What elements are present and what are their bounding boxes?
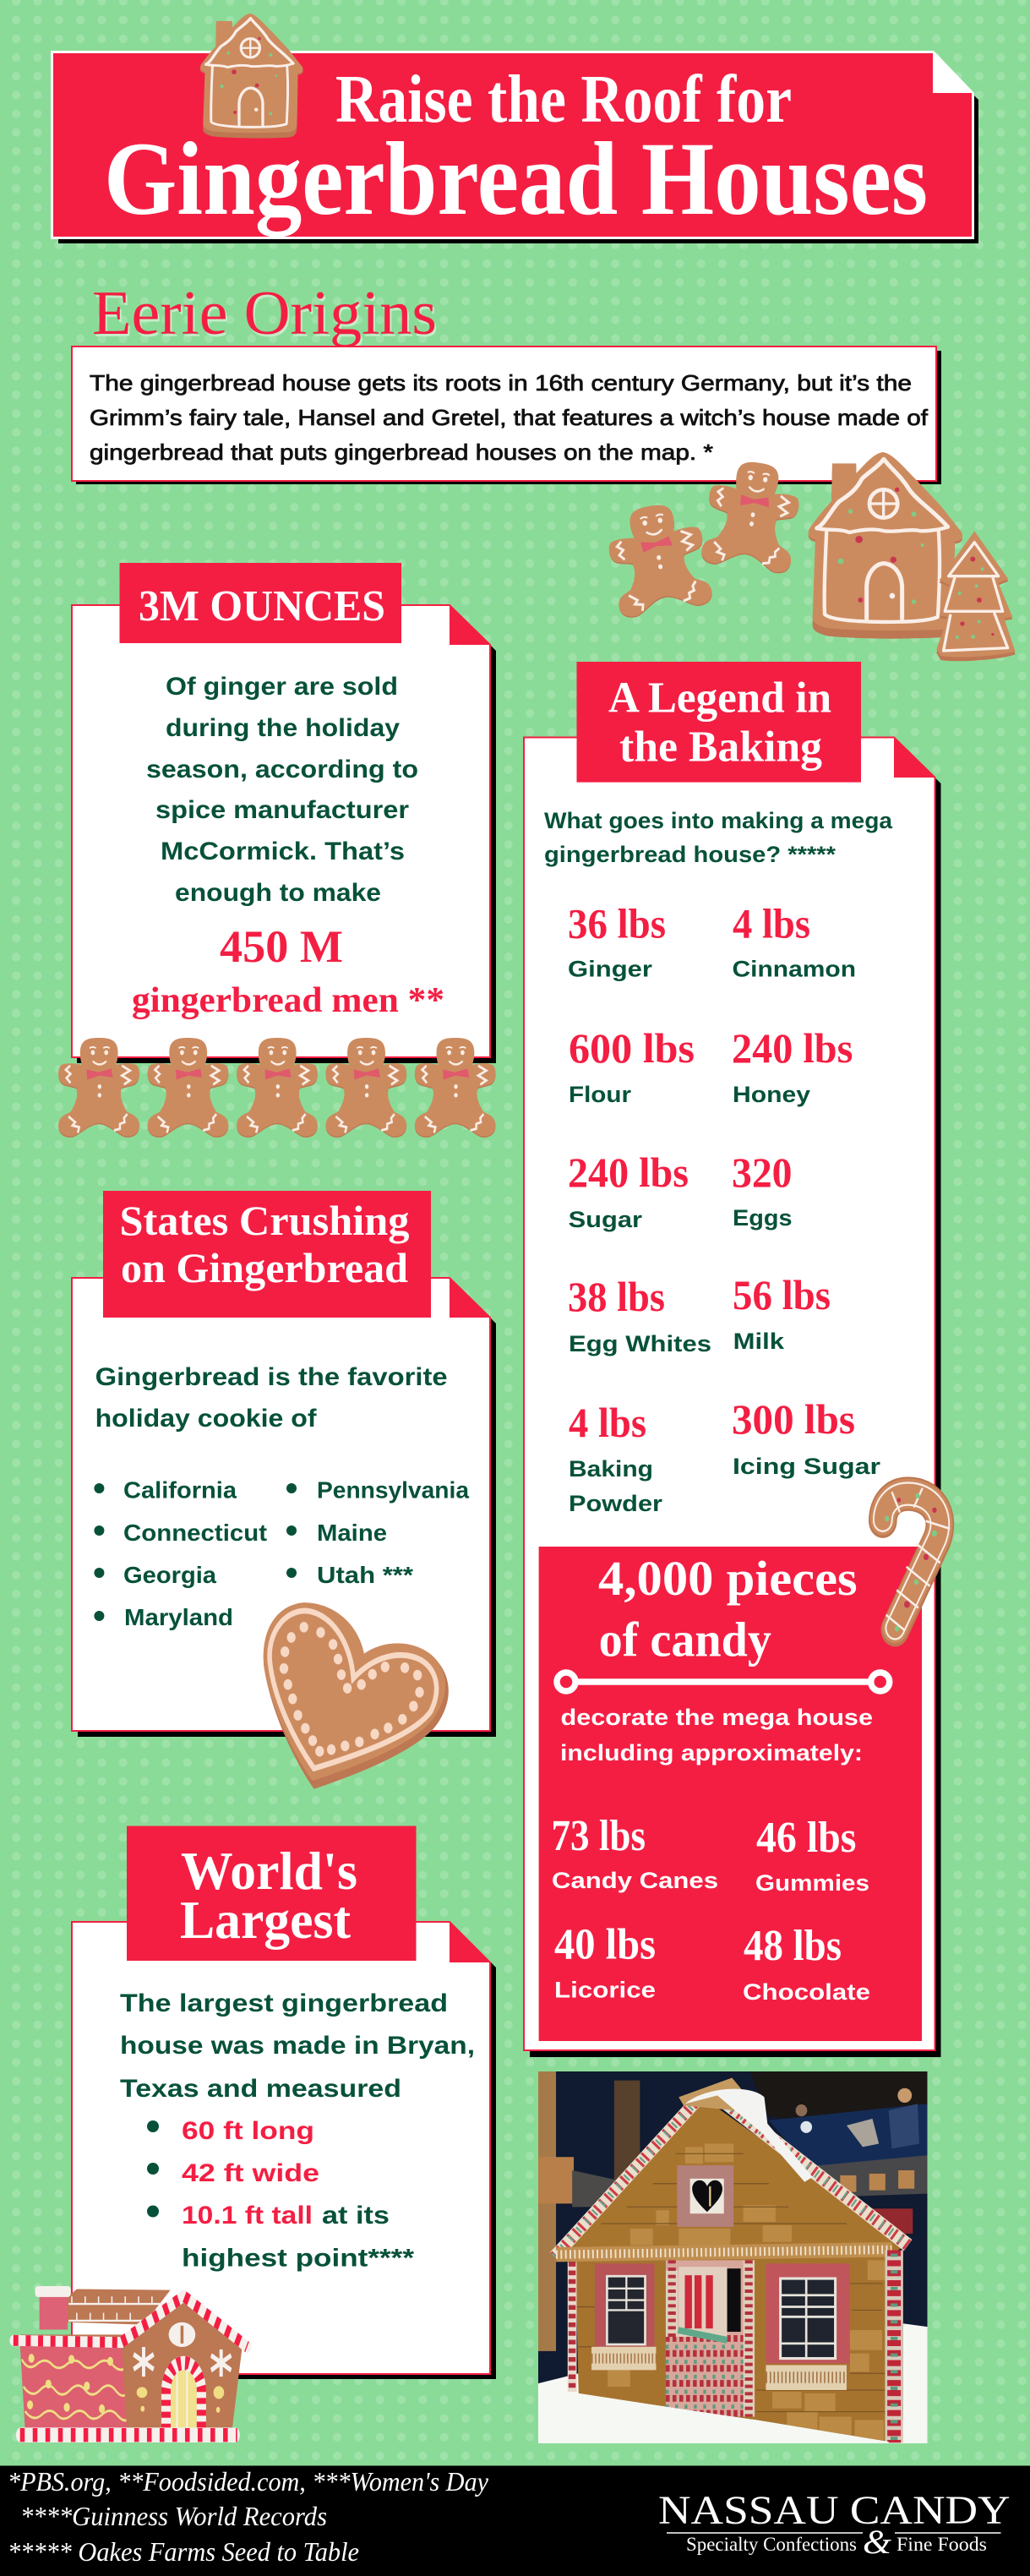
tab: world's largest [127,1826,416,1961]
ginger paragraph: enough to make [175,879,381,907]
measurements list [147,2117,414,2272]
tab: states crushing [103,1191,431,1318]
measurements list: at its [322,2202,390,2229]
tab: world's largest: Largest [180,1890,352,1950]
candy: candy canes: Candy Canes [552,1868,718,1893]
panel: states crushing on gingerbread [72,1191,496,1737]
ingredient: flour: Flour [569,1082,632,1107]
states list: California [123,1477,237,1504]
title banner [51,51,978,243]
tab: a legend in the baking: the Baking [619,723,822,772]
states intro: holiday cookie of [95,1405,318,1433]
tab: 3M ounces [120,563,401,643]
states list: Georgia [123,1562,216,1588]
measurements list: 60 ft long [182,2117,314,2145]
source citations: ***** Oakes Farms Seed to Table [8,2536,359,2567]
ingredient: egg whites [568,1273,711,1356]
ingredient: baking powder: 4 lbs [569,1399,646,1446]
states list: Connecticut [123,1520,267,1546]
ingredient: egg whites: Egg Whites [569,1331,711,1356]
states list [94,1477,469,1630]
origins paragraph: gingerbread that puts gingerbread houses on the map. * [90,439,713,465]
measurements list: highest point**** [182,2245,414,2272]
ingredient: baking powder [569,1399,663,1516]
states list: Maine [317,1520,387,1546]
ingredient: cinnamon: Cinnamon [732,957,856,982]
icon: gingerbread house on banner [200,14,302,139]
stat: 450 M: 450 M [220,921,343,972]
origins paragraph: The gingerbread house gets its roots in 16th century Germany, but it’s the [90,370,912,396]
divider with rings [557,1673,890,1691]
ginger paragraph: Of ginger are sold [166,673,398,701]
icon: gingerbread man left [602,498,714,619]
candy: licorice: Licorice [554,1978,656,2003]
title line two: Gingerbread Houses [104,121,928,237]
panel: world's largest [72,1826,496,2379]
logo: Nassau Candy [658,2488,1011,2561]
candy: gummies [755,1814,869,1896]
ingredient: baking powder: Powder [569,1491,663,1516]
candy: candy canes: 73 lbs [551,1812,646,1860]
ingredient: eggs: Eggs [733,1205,793,1231]
candy: chocolate: Chocolate [743,1979,870,2005]
ingredient: eggs [732,1149,793,1231]
largest house paragraph: house was made in Bryan, [120,2032,475,2060]
candy: gummies: 46 lbs [756,1814,856,1862]
ingredient: honey: 240 lbs [732,1024,853,1072]
ingredient: egg whites: 38 lbs [568,1273,665,1320]
row of gingerbread men [58,1038,496,1138]
icon: gingerbread tree [936,531,1016,661]
ginger paragraph: season, according to [146,756,418,783]
ingredient: cinnamon: 4 lbs [733,899,810,947]
heading: Eerie Origins: Eerie Origins [92,279,437,348]
ingredient: eggs: 320 [732,1149,793,1196]
icon: gingerbread heart [264,1602,449,1789]
candy: candy canes [551,1812,718,1893]
ingredient: honey: Honey [733,1082,810,1107]
tab: a legend in the baking [576,662,861,783]
candy: licorice [554,1921,656,2003]
candy intro: including approximately: [560,1740,863,1766]
icon: gingerbread house [809,452,962,639]
largest house paragraph: Texas and measured [120,2075,401,2103]
footer bar [0,2466,1030,2576]
ingredient: sugar: 240 lbs [568,1149,689,1196]
ingredient: ginger [568,899,666,982]
panel: 4,000 pieces of candy [539,1547,922,2041]
ingredient: flour: 600 lbs [569,1024,695,1072]
title line one: Raise the Roof for [335,63,792,137]
candy: gummies: Gummies [755,1870,869,1896]
ginger paragraph: spice manufacturer [155,796,409,824]
ingredient: honey [732,1024,853,1107]
ingredient: milk: Milk [733,1329,785,1354]
ingredient: milk [733,1271,831,1354]
measurements list: 10.1 ft tall [182,2202,313,2229]
icon: candy gingerbread house [14,2286,248,2442]
origins paragraph: Grimm’s fairy tale, Hansel and Gretel, that features a witch’s house made of [90,405,929,430]
panel: a legend in the baking [524,662,941,2057]
states list: Utah *** [317,1562,413,1588]
ingredient: ginger: Ginger [568,957,653,982]
icon: gingerbread candy cane [883,1488,950,1631]
states list: Pennsylvania [317,1477,469,1504]
states list: Maryland [124,1604,233,1630]
tab: a legend in the baking: A Legend in [608,674,831,722]
tab: 3M ounces: 3M OUNCES [139,582,385,630]
baking intro: gingerbread house? ***** [544,842,837,867]
largest house paragraph: The largest gingerbread [120,1989,448,2017]
ingredient: icing sugar: Icing Sugar [733,1454,881,1479]
tab: states crushing: States Crushing [120,1197,409,1244]
panel: 3M ounces [72,563,496,1063]
ingredient: flour [569,1024,695,1107]
measurements list: 42 ft wide [182,2159,319,2187]
ingredient: icing sugar [732,1395,881,1479]
ingredient: cinnamon [732,899,856,982]
source citations: *PBS.org, **Foodsided.com, ***Women's Day [8,2466,489,2497]
states intro: Gingerbread is the favorite [95,1363,448,1391]
candy heading: of candy [599,1613,771,1667]
stat label: gingerbread men: gingerbread men ** [132,981,444,1020]
ingredient: icing sugar: 300 lbs [732,1395,855,1443]
logo: Nassau Candy: NASSAU CANDY [658,2488,1011,2533]
logo: Nassau Candy: Fine Foods [896,2534,987,2555]
candy: licorice: 40 lbs [554,1921,656,1969]
ingredient: sugar [568,1149,689,1232]
candy: chocolate: 48 lbs [744,1922,842,1970]
ginger paragraph: during the holiday [166,714,400,742]
candy heading: 4,000 pieces [598,1551,858,1606]
logo: Nassau Candy: & [863,2523,891,2561]
candy intro: decorate the mega house [561,1705,873,1730]
ginger paragraph: McCormick. That’s [161,838,405,865]
source citations: ****Guinness World Records [20,2501,327,2531]
ingredient: ginger: 36 lbs [568,899,666,947]
photo: real gingerbread house [538,2071,928,2443]
candy: chocolate [743,1922,870,2005]
tab: world's largest: World's [181,1841,357,1901]
tab: states crushing: on Gingerbread [121,1244,408,1291]
panel: eerie origins text [72,347,941,484]
ingredient: milk: 56 lbs [733,1271,831,1318]
baking intro: What goes into making a mega [544,808,893,833]
ingredient: sugar: Sugar [569,1207,643,1232]
ingredient: baking powder: Baking [569,1456,653,1482]
icon: gingerbread man right [700,456,804,575]
logo: Nassau Candy: Specialty Confections [686,2534,857,2555]
